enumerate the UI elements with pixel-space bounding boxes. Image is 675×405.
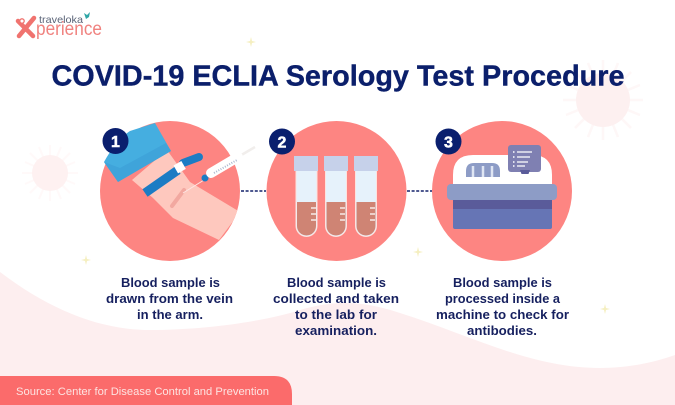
arm <box>132 150 240 240</box>
source bar: Source: Center for Disease Control and Prevention <box>16 386 269 398</box>
syringe <box>183 147 255 193</box>
vein mark <box>172 190 184 206</box>
step 2 illustration: test tubes <box>266 121 406 261</box>
connector: step 2 to 3 <box>407 190 432 192</box>
step 2 caption: collected and taken <box>273 291 399 306</box>
source bar <box>0 376 292 405</box>
sample window <box>466 163 500 177</box>
logo: Traveloka Xperience <box>18 12 102 40</box>
logo: Traveloka Xperience: perience <box>36 19 102 40</box>
connector: step 1 to 2 <box>241 190 266 192</box>
step 3 caption: processed inside a <box>445 291 561 306</box>
step 1 caption: Blood sample is <box>121 275 220 290</box>
number badge 1 <box>102 128 128 154</box>
step 2 caption: to the lab for <box>295 307 377 322</box>
sleeve <box>104 123 171 182</box>
number badge 2: 2 <box>278 134 287 152</box>
pink wave background <box>0 272 675 405</box>
number badge 2 <box>269 128 295 154</box>
number badge 1: 1 <box>111 134 120 151</box>
step 3 caption: Blood sample is <box>453 275 552 290</box>
step 2 caption: Blood sample is <box>287 275 386 290</box>
tube 1 <box>294 156 318 236</box>
step 1 caption: in the arm. <box>137 307 203 322</box>
number badge 3: 3 <box>444 134 453 152</box>
tube 3 <box>354 156 378 236</box>
sparkles <box>81 37 610 314</box>
step 1 illustration: blood draw from arm <box>100 121 255 261</box>
step 3 caption: antibodies. <box>467 323 537 338</box>
step 2 caption: examination. <box>295 323 377 338</box>
step 1 caption <box>106 275 233 322</box>
step 3 caption: machine to check for <box>436 307 569 322</box>
number badge 3 <box>436 128 462 154</box>
machine body <box>453 199 552 229</box>
step 3 caption <box>436 275 569 338</box>
logo: Traveloka Xperience: traveloka <box>39 14 83 26</box>
step 2 caption <box>273 275 399 338</box>
step 3 illustration: analysis machine <box>432 121 572 261</box>
decorative virus left <box>22 145 78 201</box>
step 1 caption: drawn from the vein <box>106 291 233 306</box>
machine dome <box>453 155 552 186</box>
decorative virus right <box>563 60 643 140</box>
top band <box>447 184 557 200</box>
title: COVID-19 ECLIA Serology Test Procedure <box>52 60 624 92</box>
tube 2 <box>324 156 348 236</box>
tourniquet <box>145 170 178 193</box>
screen <box>508 145 541 172</box>
